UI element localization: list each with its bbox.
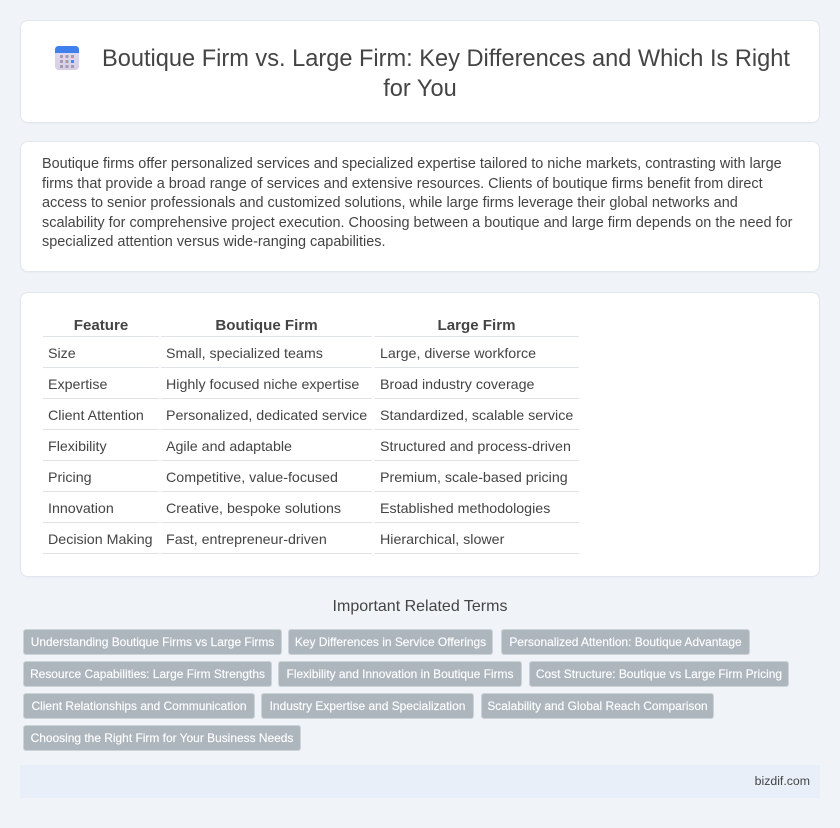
intro paragraph: access to senior professionals and customized solutions, while large firms leverage their global networks and — [42, 195, 738, 211]
tag — [23, 693, 255, 719]
intro paragraph — [42, 156, 792, 250]
tag: Industry Expertise and Specialization — [270, 699, 465, 713]
tag: Client Relationships and Communication — [32, 699, 246, 713]
row: decision making — [48, 532, 504, 548]
icon: calendar — [55, 46, 79, 70]
comparison table panel — [20, 292, 820, 577]
row: expertise: Broad industry coverage — [380, 377, 534, 393]
table header row: Large Firm — [437, 317, 516, 334]
tag — [501, 629, 750, 655]
intro paragraph: specialized attention versus wide-ranging capabilities. — [42, 234, 385, 250]
row: decision making: Fast, entrepreneur-driven — [166, 532, 327, 548]
tag — [23, 661, 272, 687]
row: client attention: Personalized, dedicated service — [166, 408, 367, 424]
row: size: Size — [48, 346, 76, 362]
table header row: Feature — [74, 317, 128, 334]
intro paragraph: scalability for comprehensive project execution. Choosing between a boutique and large firm depends on the need for — [42, 215, 792, 231]
tag — [288, 629, 493, 655]
row: size: Large, diverse workforce — [380, 346, 536, 362]
row: flexibility: Agile and adaptable — [166, 439, 292, 455]
tag: Choosing the Right Firm for Your Business Needs — [31, 731, 293, 745]
row: size — [48, 346, 536, 362]
row: flexibility: Flexibility — [48, 439, 107, 455]
table header row: Boutique Firm — [215, 317, 318, 334]
row: flexibility: Structured and process-driven — [380, 439, 571, 455]
footer source: bizdif.com — [755, 774, 810, 788]
related terms heading: Important Related Terms — [333, 598, 507, 615]
row: pricing: Premium, scale-based pricing — [380, 470, 568, 486]
comparison table — [43, 317, 579, 554]
row: expertise: Highly focused niche expertise — [166, 377, 359, 393]
row: expertise: Expertise — [48, 377, 107, 393]
tag: Scalability and Global Reach Comparison — [487, 699, 708, 713]
tag: Flexibility and Innovation in Boutique Firms — [287, 667, 513, 681]
intro text panel — [20, 141, 820, 272]
intro paragraph: firms that provide a broad range of services and extensive resources. Clients of boutique firms benefit from direct — [42, 176, 763, 192]
row: pricing: Competitive, value-focused — [166, 470, 338, 486]
row: decision making: Hierarchical, slower — [380, 532, 504, 548]
row: client attention: Client Attention — [48, 408, 144, 424]
tag: Personalized Attention: Boutique Advantage — [509, 635, 742, 649]
row: innovation: Established methodologies — [380, 501, 550, 517]
row: expertise — [48, 377, 534, 393]
tag: Resource Capabilities: Large Firm Strengths — [30, 667, 265, 681]
tag — [23, 629, 282, 655]
tag — [23, 725, 301, 751]
title: Boutique Firm vs. Large Firm: Key Differences and Which Is Right — [102, 46, 790, 72]
row: client attention: Standardized, scalable service — [380, 408, 573, 424]
tag: Understanding Boutique Firms vs Large Firms — [31, 635, 274, 649]
tag: Cost Structure: Boutique vs Large Firm Pricing — [536, 667, 782, 681]
row: size: Small, specialized teams — [166, 346, 323, 362]
tag — [481, 693, 714, 719]
row: decision making: Decision Making — [48, 532, 153, 548]
row: pricing: Pricing — [48, 470, 92, 486]
tag — [278, 661, 522, 687]
row: flexibility — [48, 439, 571, 455]
header panel — [20, 20, 820, 123]
tag — [529, 661, 789, 687]
row: innovation — [48, 501, 550, 517]
footer bar — [20, 765, 820, 798]
row: client attention — [48, 408, 573, 424]
intro paragraph: Boutique firms offer personalized services and specialized expertise tailored to niche markets, contrasting with large — [42, 156, 782, 172]
tag: Key Differences in Service Offerings — [295, 635, 486, 649]
row: innovation: Innovation — [48, 501, 114, 517]
title — [102, 46, 790, 102]
title: for You — [383, 76, 457, 102]
table header row — [74, 317, 516, 334]
related term tags — [23, 629, 789, 751]
row: pricing — [48, 470, 568, 486]
tag — [261, 693, 474, 719]
row: innovation: Creative, bespoke solutions — [166, 501, 341, 517]
